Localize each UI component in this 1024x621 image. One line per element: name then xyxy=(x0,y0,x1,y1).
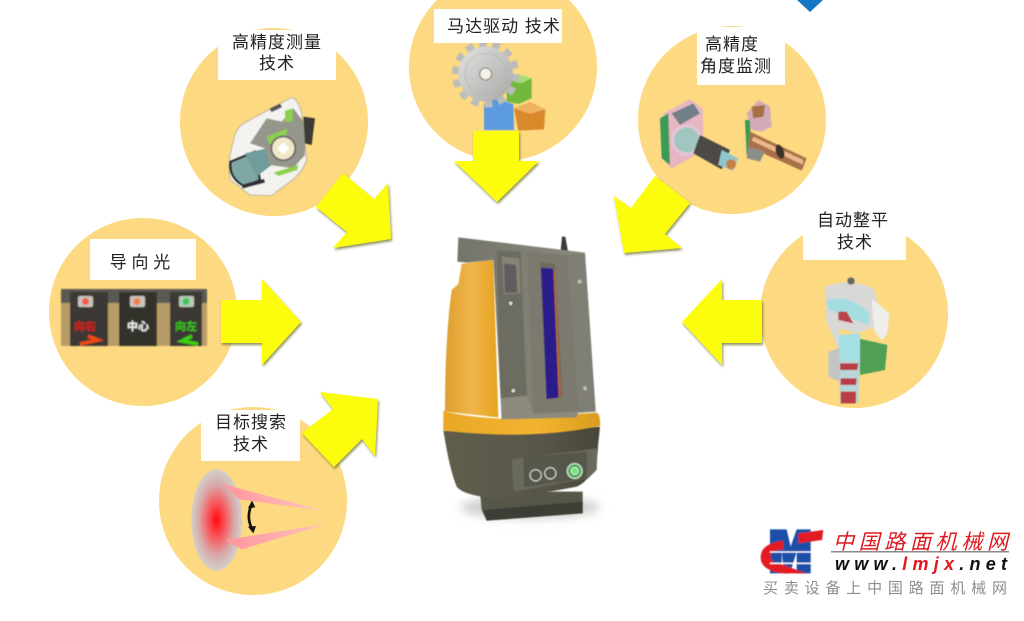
label: 高精度测量技术 xyxy=(218,30,336,80)
device yellow body xyxy=(445,260,498,417)
device shadow xyxy=(460,496,600,519)
image: three guide light states: 向右 xyxy=(74,319,96,333)
panel: 目标搜索技术 xyxy=(159,407,347,595)
label: 高精度角度监测: 高精度 xyxy=(705,35,759,54)
panel: 导向光 xyxy=(49,218,237,406)
label: 自动整平技术 xyxy=(803,208,906,260)
device base xyxy=(480,492,583,521)
icon: auto leveling cutaway xyxy=(825,277,889,403)
image: three guide light states: 向左 xyxy=(175,319,197,333)
logo URL: www. lmjx .net xyxy=(835,554,1008,574)
label: 高精度测量技术: 高精度测量 xyxy=(232,33,322,52)
logo mark xyxy=(761,529,823,573)
arrow: from motor drive to device xyxy=(454,131,539,202)
device purple window xyxy=(540,263,563,399)
panel: 自动整平技术 xyxy=(760,220,948,408)
label: 导向光: 导 向 光 xyxy=(110,253,170,272)
device lower housing xyxy=(443,427,600,499)
label: 自动整平技术: 技术 xyxy=(837,233,873,252)
device control panel xyxy=(512,448,598,492)
image: three guide light states xyxy=(61,289,207,346)
label: 高精度测量技术: 技术 xyxy=(259,54,295,73)
icon: angle sensor cutaways xyxy=(660,99,807,171)
logo rule xyxy=(831,551,1009,552)
label: 目标搜索技术: 技术 xyxy=(233,435,269,454)
logo Chinese name: 中国路面机械网 xyxy=(833,531,1011,554)
arrow: from measurement to device xyxy=(316,173,391,248)
device antenna xyxy=(561,237,568,251)
corner marker xyxy=(797,0,823,12)
arrow: from auto leveling to device xyxy=(682,279,762,365)
label: 高精度角度监测: 角度监测 xyxy=(700,57,772,76)
logo: 中国路面机械网 xyxy=(761,529,1011,597)
label: 导向光 xyxy=(90,239,196,280)
panel: 高精度测量技术 xyxy=(180,28,368,216)
icon: gear and cubes xyxy=(456,45,545,131)
panel: 高精度角度监测 xyxy=(638,26,826,214)
label: 马达驱动技术: 马达驱动 技术 xyxy=(447,17,561,36)
device grey head and front panels xyxy=(457,237,596,419)
arrow: from angle monitoring to device xyxy=(614,176,690,253)
arrow: from guide light to device xyxy=(221,279,301,365)
image: three guide light states: 中心 xyxy=(127,319,149,333)
label: 目标搜索技术 xyxy=(201,410,300,461)
label: 目标搜索技术: 目标搜索 xyxy=(215,413,287,432)
label: 高精度角度监测 xyxy=(697,27,785,85)
label: 自动整平技术: 自动整平 xyxy=(817,211,889,230)
panel: 马达驱动技术 xyxy=(409,0,597,161)
device yellow collar xyxy=(443,411,600,435)
logo slogan: 买卖设备上中国路面机械网 xyxy=(763,580,1007,597)
arrow: from target search to device xyxy=(302,392,378,467)
label: 马达驱动技术 xyxy=(434,9,562,43)
device: laser instrument xyxy=(443,237,600,521)
icon: measurement module cutaway xyxy=(229,97,315,196)
icon: target search beam xyxy=(191,469,327,571)
